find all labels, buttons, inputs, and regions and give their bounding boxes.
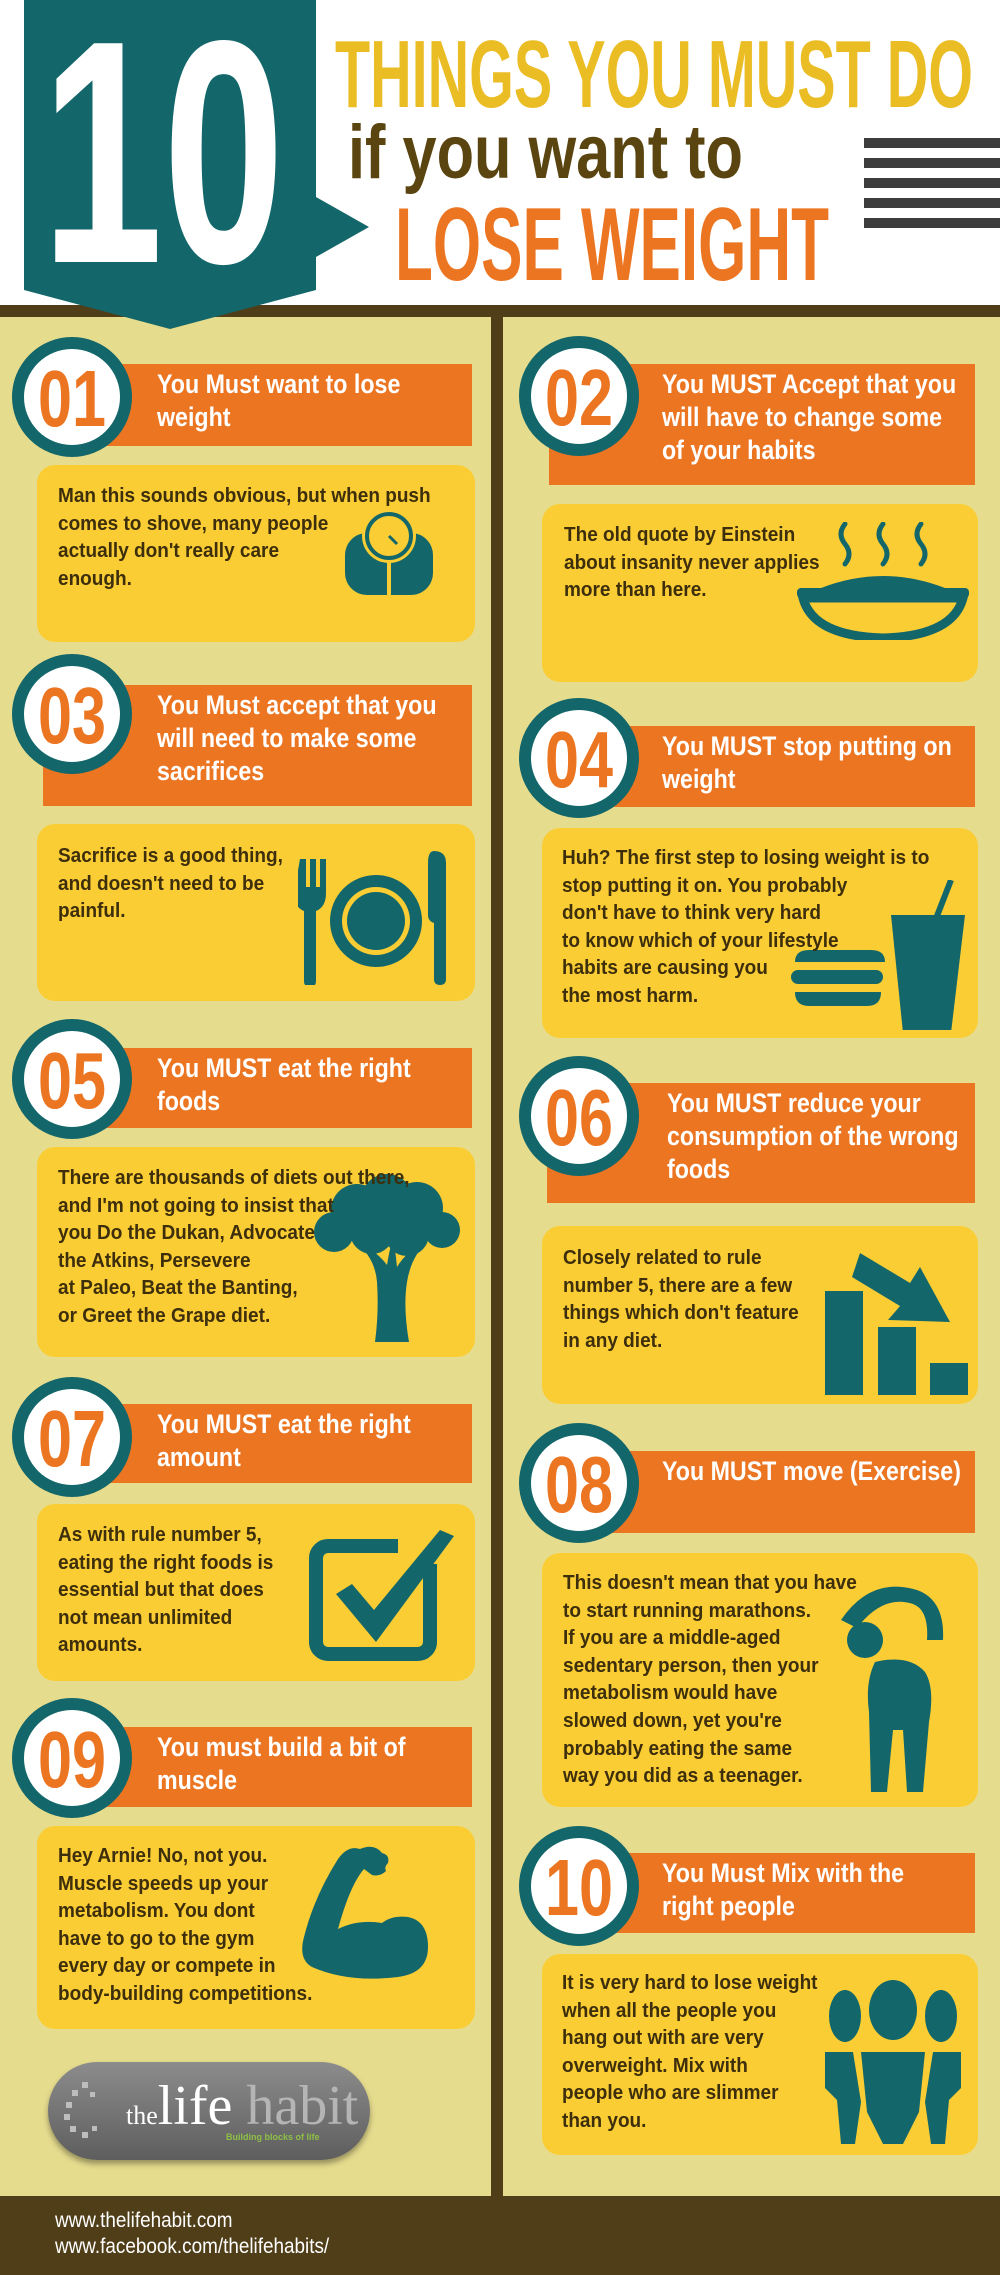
body 08: probably eating the same [563, 1738, 792, 1760]
body 09: body-building competitions. [58, 1983, 312, 2005]
heading 03 [156, 690, 437, 786]
header background [0, 0, 1000, 307]
title text [335, 21, 973, 300]
body 04: Huh? The first step to losing weight is to [562, 847, 929, 869]
bar 05 [43, 1048, 472, 1128]
item 06 [505, 1045, 1000, 1410]
body 09: metabolism. You dont [58, 1900, 255, 1922]
heading 10: You Must Mix with the [662, 1858, 904, 1888]
number circle 04: 04 [545, 715, 613, 804]
card 07 [37, 1504, 475, 1681]
heading 05: foods [157, 1086, 220, 1116]
body 09: Hey Arnie! No, not you. [58, 1845, 267, 1867]
header brown bar [0, 305, 1000, 317]
bar 01 [43, 364, 472, 446]
body 04: to know which of your lifestyle [562, 930, 839, 952]
heading 04 [662, 731, 952, 794]
body 08: slowed down, yet you're [563, 1710, 782, 1732]
heading 09 [157, 1732, 406, 1795]
heading 10 [662, 1857, 904, 1923]
body 09 [58, 1845, 312, 2005]
body 04: don't have to think very hard [562, 902, 821, 924]
item 07 [12, 1377, 475, 1681]
card 06 [542, 1226, 978, 1404]
number circle 07: 07 [38, 1394, 106, 1483]
body 05 [58, 1167, 410, 1327]
body 03: and doesn't need to be [58, 873, 264, 895]
heading 01: You Must want to lose [157, 369, 400, 399]
body 07: eating the right foods is [58, 1552, 273, 1574]
body 01: actually don't really care [58, 540, 279, 562]
column divider [491, 305, 503, 2196]
body 06: things which don't feature [563, 1302, 799, 1324]
body 01: Man this sounds obvious, but when push [58, 485, 431, 507]
icon: stripes [864, 138, 1000, 228]
body 03: Sacrifice is a good thing, [58, 845, 283, 867]
body 10: than you. [562, 2110, 646, 2132]
heading 07: You MUST eat the right [157, 1409, 411, 1439]
footer [0, 2196, 1000, 2275]
body 08 [563, 1570, 857, 1791]
bar 03 [43, 685, 472, 806]
body 05: you Do the Dukan, Advocate [58, 1222, 315, 1244]
body 07 [58, 1524, 273, 1656]
card 03 [37, 824, 475, 1001]
body 10: people who are slimmer [562, 2082, 778, 2104]
icon: broccoli [314, 1174, 460, 1342]
item 10 [505, 1820, 1000, 2165]
body 05: the Atkins, Persevere [58, 1250, 251, 1272]
body 08: sedentary person, then your [563, 1655, 819, 1677]
number circle 09 [12, 1698, 132, 1818]
body 07: not mean unlimited [58, 1607, 232, 1629]
item 08 [505, 1410, 1000, 1820]
body 02: about insanity never applies [564, 552, 820, 574]
heading 01: weight [157, 402, 231, 432]
body 02 [564, 524, 820, 601]
card 05 [37, 1147, 475, 1357]
heading 05: You MUST eat the right [157, 1053, 411, 1083]
heading 06 [667, 1087, 959, 1186]
number circle 02: 02 [545, 353, 613, 442]
heading 04: You MUST stop putting on [662, 731, 952, 761]
bar 08 [549, 1451, 975, 1533]
title text: if you want to [348, 110, 743, 195]
heading 07 [157, 1409, 411, 1472]
footer links [55, 2208, 329, 2260]
body 08: metabolism would have [563, 1682, 777, 1704]
heading 09: You must build a bit of [157, 1732, 406, 1762]
number circle 03 [12, 654, 132, 774]
body 06: number 5, there are a few [563, 1275, 792, 1297]
heading 03: will need to make some [157, 723, 416, 753]
icon: fork plate knife [298, 851, 446, 985]
footer links: www.thelifehabit.com [55, 2209, 233, 2232]
heading 03: sacrifices [157, 756, 264, 786]
number circle 08: 08 [545, 1440, 613, 1529]
logo text: thelife habit [126, 2075, 358, 2137]
heading 02: will have to change some [662, 402, 942, 432]
body 01: comes to shove, many people [58, 513, 328, 535]
icon: declining chart [820, 1243, 970, 1398]
body 08: to start running marathons. [563, 1600, 811, 1622]
logo tagline: Building blocks of life [226, 2132, 320, 2142]
heading 10: right people [662, 1891, 795, 1921]
heading 02: You MUST Accept that you [662, 369, 956, 399]
logo dots [64, 2082, 97, 2138]
card 08 [542, 1553, 978, 1807]
number circle 06: 06 [545, 1073, 613, 1162]
icon: group of people [823, 1980, 963, 2145]
body 01: enough. [58, 568, 132, 590]
heading 03: You Must accept that you [157, 690, 437, 720]
item 04 [519, 698, 978, 1038]
number circle 09: 09 [38, 1715, 106, 1804]
number circle 03: 03 [38, 671, 106, 760]
body 07: amounts. [58, 1634, 142, 1656]
body 10 [562, 1970, 818, 2136]
body 06: Closely related to rule [563, 1247, 762, 1269]
body 10: when all the people you [562, 2000, 776, 2022]
item 05 [12, 1019, 475, 1357]
number circle 08 [517, 1421, 641, 1545]
heading 05 [157, 1053, 411, 1116]
body 03 [58, 845, 283, 922]
body 06 [563, 1245, 799, 1355]
body 09: have to go to the gym [58, 1928, 254, 1950]
heading 06: consumption of the wrong [667, 1121, 959, 1151]
heading 06: You MUST reduce your [667, 1088, 921, 1118]
icon: scale [345, 512, 433, 595]
item 01 [12, 337, 475, 642]
item 02 [519, 336, 978, 682]
number circle 10: 10 [545, 1843, 613, 1932]
body 02: The old quote by Einstein [564, 524, 795, 546]
number circle 10 [517, 1824, 641, 1948]
bar 09 [43, 1727, 472, 1807]
icon: bicep [302, 1846, 428, 1979]
number circle 05: 05 [38, 1036, 106, 1125]
body 10: hang out with are very [562, 2027, 764, 2049]
body 05: at Paleo, Beat the Banting, [58, 1277, 298, 1299]
card 01 [37, 465, 475, 642]
card 10 [542, 1954, 978, 2155]
number circle 01: 01 [38, 354, 106, 443]
body 05: There are thousands of diets out there, [58, 1167, 410, 1189]
heading 06: foods [667, 1154, 730, 1184]
icon: burger and drink [791, 880, 965, 1030]
body 01 [58, 485, 431, 590]
body 04 [562, 847, 929, 1007]
bar 06 [547, 1083, 975, 1203]
card 04 [542, 828, 978, 1038]
body 03: painful. [58, 900, 126, 922]
bar 04 [549, 726, 975, 807]
card 09 [37, 1826, 475, 2029]
footer links: www.facebook.com/thelifehabits/ [55, 2235, 329, 2258]
body 04: the most harm. [562, 985, 698, 1007]
heading 09: muscle [157, 1765, 237, 1795]
icon: stretching person [835, 1582, 947, 1794]
body 04: stop putting it on. You probably [562, 875, 847, 897]
bar 02 [549, 364, 975, 485]
heading 01 [156, 369, 400, 432]
body 06: in any diet. [563, 1330, 662, 1352]
body 04: habits are causing you [562, 957, 768, 979]
body 10: It is very hard to lose weight [562, 1972, 818, 1994]
heading 02: of your habits [662, 435, 816, 465]
body 08: If you are a middle-aged [563, 1627, 781, 1649]
item 09 [12, 1698, 475, 2029]
number circle 06 [517, 1054, 641, 1178]
item 03 [12, 654, 475, 1001]
heading 07: amount [157, 1442, 241, 1472]
body 07: essential but that does [58, 1579, 264, 1601]
number circle 05 [12, 1019, 132, 1139]
body 02: more than here. [564, 579, 707, 601]
body 08: way you did as a teenager. [563, 1765, 803, 1787]
heading 02 [662, 369, 956, 465]
number circle 04 [519, 698, 639, 818]
body 08: This doesn't mean that you have [563, 1572, 857, 1594]
heading 08: You MUST move (Exercise) [662, 1456, 961, 1486]
number circle 01 [12, 337, 132, 457]
icon: checkbox [309, 1530, 454, 1661]
body 05: or Greet the Grape diet. [58, 1305, 270, 1327]
bar 10 [549, 1853, 975, 1933]
body 07: As with rule number 5, [58, 1524, 262, 1546]
bar 07 [43, 1404, 472, 1483]
body 09: every day or compete in [58, 1955, 276, 1977]
number circle 02 [519, 336, 639, 456]
body 05: and I'm not going to insist that [58, 1195, 334, 1217]
body 10: overweight. Mix with [562, 2055, 748, 2077]
logo: the life habit [48, 2062, 370, 2160]
icon: bowl [797, 522, 969, 640]
heading 04: weight [662, 764, 736, 794]
card 02 [542, 504, 978, 682]
number circle 07 [12, 1377, 132, 1497]
body 09: Muscle speeds up your [58, 1873, 268, 1895]
